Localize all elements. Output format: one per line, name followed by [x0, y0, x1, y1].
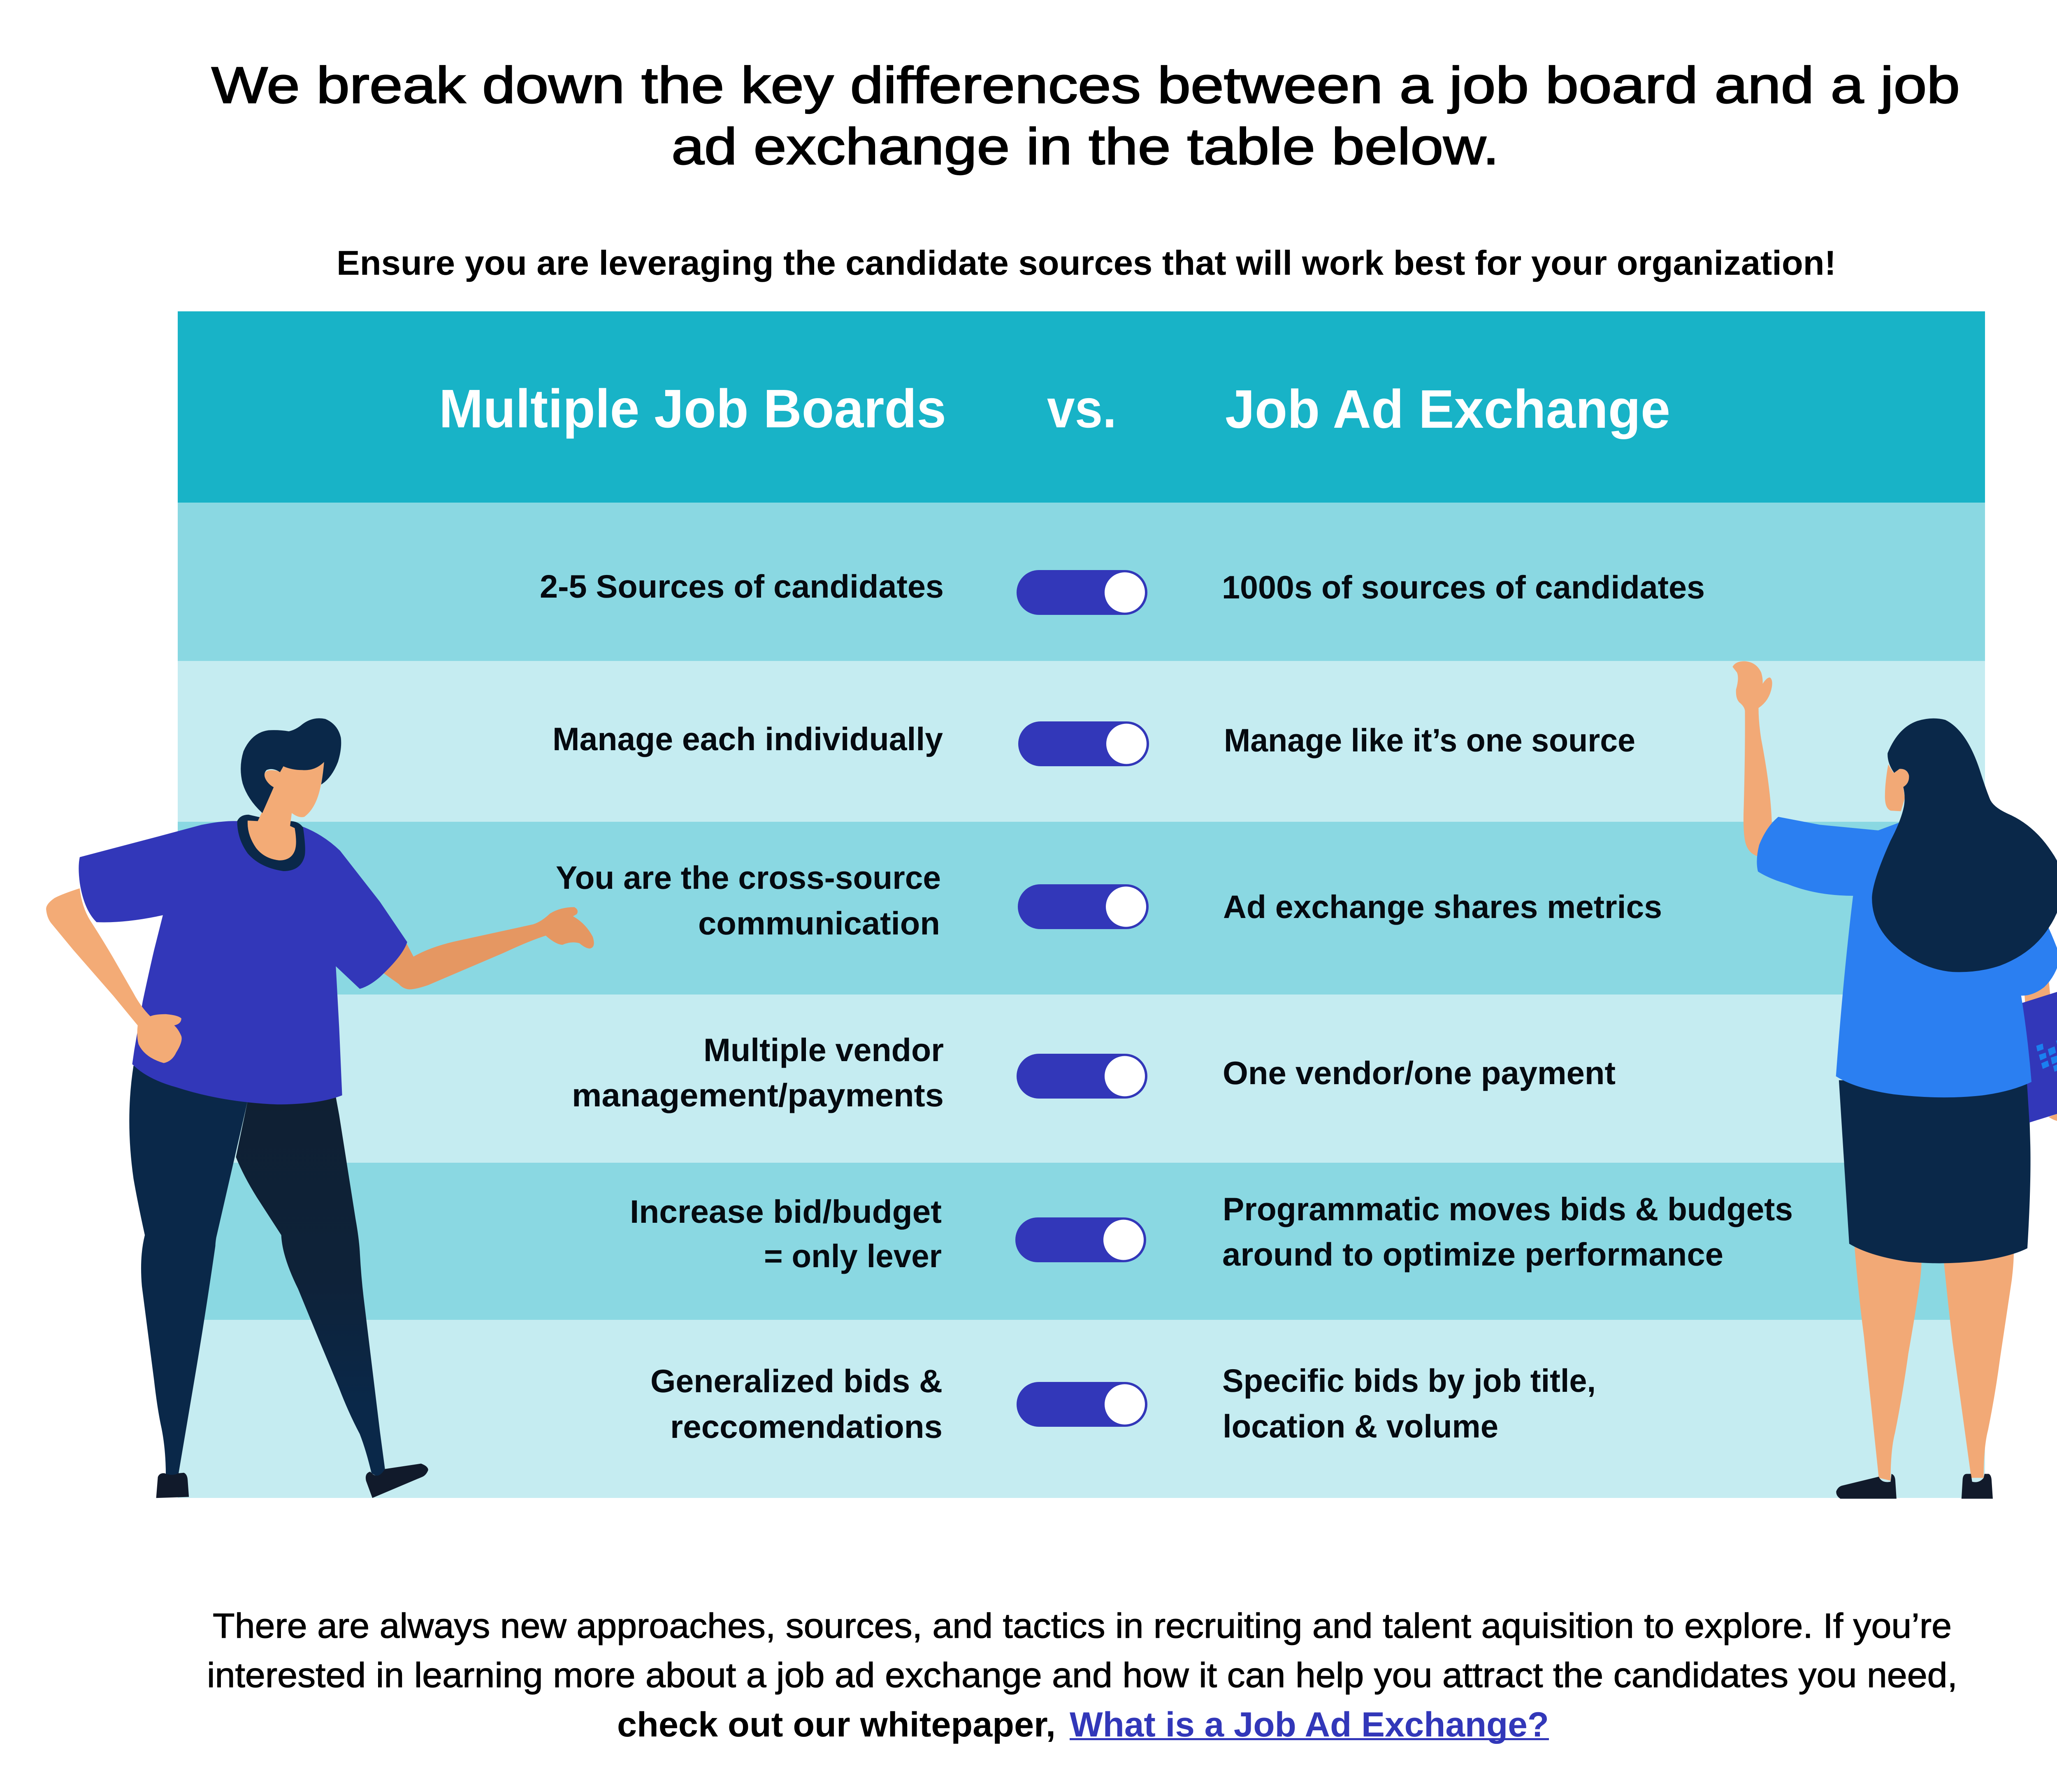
woman raised arm [1732, 661, 1772, 856]
row 2: management: Manage like it’s one source [1224, 722, 1635, 758]
row 5: bids and budgets: around to optimize performance [1222, 1236, 1723, 1273]
man arm on hip [46, 888, 182, 1063]
closing paragraph: interested in learning more about a job ad exchange and how it can help you attract the candidates you need, [207, 1656, 1957, 1695]
row 5: bids and budgets: = only lever [764, 1238, 942, 1274]
row 6: specificity: Generalized bids & [650, 1363, 943, 1399]
illustration: woman with tablet [1732, 661, 2057, 1499]
closing paragraph: There are always new approaches, sources, and tactics in recruiting and talent aquisition to explore. If you’re [213, 1607, 1952, 1646]
table header band: vs. [1047, 378, 1117, 439]
title: We break down the key differences between a job board and a job [211, 57, 1960, 114]
row 3: communication: communication [698, 905, 940, 941]
table header band: Job Ad Exchange [1225, 379, 1670, 439]
row 3: communication [178, 822, 1985, 995]
title [211, 57, 1960, 175]
man neck and face [248, 762, 324, 860]
woman hair [1872, 719, 2057, 972]
row 4: vendors: Multiple vendor [703, 1032, 944, 1068]
man t-shirt [79, 821, 407, 1104]
man hair [241, 718, 341, 813]
woman blouse [1757, 817, 2057, 1097]
title: ad exchange in the table below. [671, 118, 1499, 175]
closing paragraph [207, 1607, 1957, 1744]
comparison table [178, 311, 1985, 1498]
closing paragraph: check out our whitepaper, [617, 1705, 1056, 1744]
row 5: bids and budgets: Programmatic moves bids & budgets [1223, 1191, 1793, 1227]
row 3: communication: Ad exchange shares metrics [1223, 888, 1662, 925]
row 4: vendors: management/payments [572, 1077, 944, 1113]
row 1: sources: 2-5 Sources of candidates [540, 568, 944, 605]
woman arm holding tablet [2024, 979, 2057, 1122]
man pointing arm [380, 907, 594, 990]
table header band: Multiple Job Boards [439, 378, 946, 439]
subtitle: Ensure you are leveraging the candidate sources that will work best for your organization! [337, 243, 1836, 282]
tablet [2022, 978, 2057, 1122]
row 6: specificity [178, 1320, 1985, 1498]
row 1: sources: 1000s of sources of candidates [1222, 569, 1705, 605]
woman face [1885, 765, 1909, 811]
whitepaper link: What is a Job Ad Exchange? [1070, 1705, 1549, 1744]
woman shoes [1836, 1474, 1993, 1499]
woman skirt [1839, 1080, 2031, 1263]
man front leg [129, 1066, 248, 1476]
man back leg [236, 1097, 385, 1478]
woman legs [1855, 1247, 2014, 1481]
row 4: vendors [178, 995, 1985, 1163]
row 2: management [178, 661, 1985, 822]
table header band [178, 311, 1985, 503]
row 4: vendors: One vendor/one payment [1223, 1055, 1616, 1091]
row 6: specificity: Specific bids by job title, [1222, 1362, 1596, 1399]
row 1: sources [178, 503, 1985, 661]
illustration: man pointing [46, 718, 594, 1498]
man shoes [156, 1464, 428, 1498]
row 5: bids and budgets [178, 1163, 1985, 1320]
man collar [237, 815, 305, 871]
row 5: bids and budgets: Increase bid/budget [630, 1193, 942, 1230]
row 2: management: Manage each individually [553, 721, 943, 757]
tablet logo [2036, 1038, 2057, 1072]
row 6: specificity: location & volume [1223, 1408, 1498, 1444]
row 6: specificity: reccomendations [670, 1408, 943, 1445]
row 3: communication: You are the cross-source [556, 859, 941, 896]
